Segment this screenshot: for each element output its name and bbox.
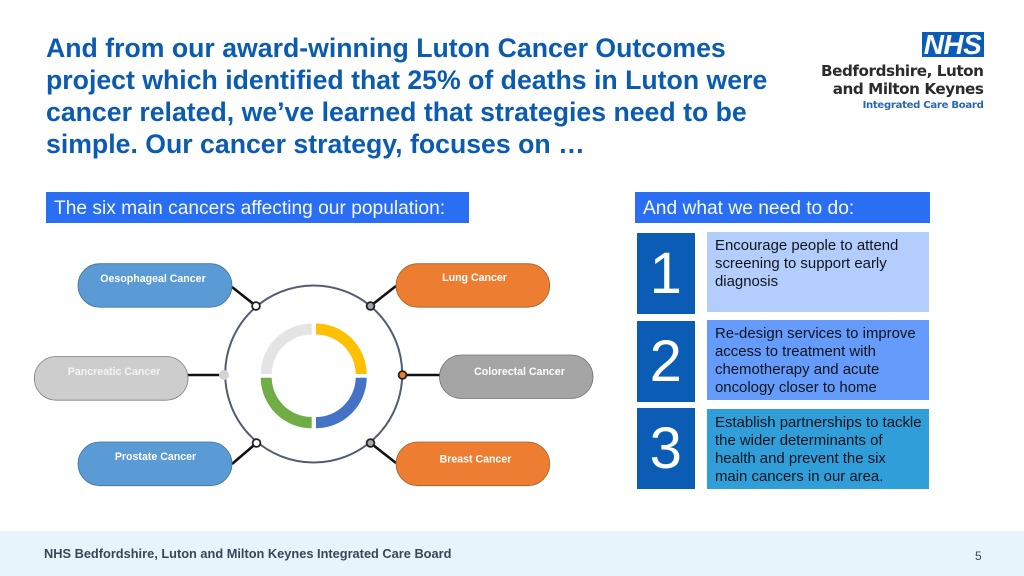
donut: blue segment (316, 378, 367, 428)
action 3 text: Establish partnerships to tackle (715, 414, 922, 431)
action 1 text: diagnosis (715, 273, 778, 290)
node: lung (367, 302, 374, 310)
heading: what we need to do: And what we need to do: (643, 198, 854, 219)
node: colorectal (399, 371, 406, 379)
donut: green segment (261, 378, 312, 428)
number 2: 2 (650, 328, 682, 394)
action 2 text: Re-design services to improve (715, 325, 916, 342)
number 1 (636, 233, 695, 314)
action 2 text: chemotherapy and acute (715, 361, 879, 378)
pill: Lung Cancer: Lung Cancer (442, 272, 507, 284)
action 3 text (707, 409, 929, 489)
action 1 text: screening to support early (715, 255, 887, 272)
page number: 5 (975, 549, 982, 563)
footer band (0, 531, 1024, 576)
logo: NHS Bedfordshire, Luton and Milton Keynes Integrated Care Board (821, 29, 984, 111)
logo: organisation name: Bedfordshire, Luton (821, 62, 984, 80)
footer text: NHS Bedfordshire, Luton and Milton Keynes Integrated Care Board (44, 546, 451, 561)
pill: Prostate Cancer: Prostate Cancer (115, 451, 196, 463)
action 3 text: health and prevent the six (715, 450, 886, 467)
action 2 text: access to treatment with (715, 343, 876, 360)
pill: Oesophageal Cancer (78, 264, 232, 307)
logo: organisation name (821, 62, 984, 98)
donut: yellow segment (316, 324, 367, 374)
action 2 text: oncology closer to home (715, 379, 877, 396)
title: cancer related, we’ve learned that strategies need to be (46, 97, 747, 127)
title: simple. Our cancer strategy, focuses on … (46, 129, 585, 159)
pill: Colorectal Cancer: Colorectal Cancer (474, 366, 565, 378)
logo: Integrated Care Board: Integrated Care Board (863, 100, 984, 111)
action 3 text: the wider determinants of (715, 432, 883, 449)
outer ring (225, 286, 402, 462)
pill: Pancreatic Cancer (34, 356, 188, 400)
logo: organisation name: and Milton Keynes (833, 80, 984, 98)
number 2 (636, 320, 695, 402)
node: pancreatic (219, 370, 229, 380)
title: project which identified that 25% of deaths in Luton were (46, 65, 767, 95)
node: breast (367, 439, 374, 447)
heading: six main cancers (46, 192, 469, 223)
heading: what we need to do (635, 192, 930, 223)
pill: Breast Cancer: Breast Cancer (440, 454, 511, 466)
number 3 (636, 408, 695, 489)
action 3 text: main cancers in our area. (715, 468, 883, 485)
logo: NHS lozenge: NHS (924, 29, 981, 60)
pill: Pancreatic Cancer: Pancreatic Cancer (68, 366, 160, 378)
diagram: six cancers hub (34, 263, 594, 486)
title: And from our award-winning Luton Cancer Outcomes (46, 33, 726, 63)
heading: six main cancers: The six main cancers affecting our population: (54, 198, 445, 219)
pill: Lung Cancer (396, 264, 550, 307)
number 3: 3 (650, 416, 682, 481)
node: oesophageal (252, 302, 260, 310)
number 1: 1 (650, 241, 682, 306)
pill: Colorectal Cancer (440, 355, 593, 398)
pill: Oesophageal Cancer: Oesophageal Cancer (100, 273, 206, 285)
action 1 text (707, 232, 929, 312)
node: prostate (253, 439, 260, 447)
donut: grey segment (261, 324, 312, 374)
action 2 text (707, 320, 929, 400)
action 1 text: Encourage people to attend (715, 237, 898, 254)
title (46, 33, 767, 159)
connector lines (188, 286, 440, 464)
pill: Breast Cancer (396, 442, 550, 486)
pill: Prostate Cancer (78, 442, 232, 486)
